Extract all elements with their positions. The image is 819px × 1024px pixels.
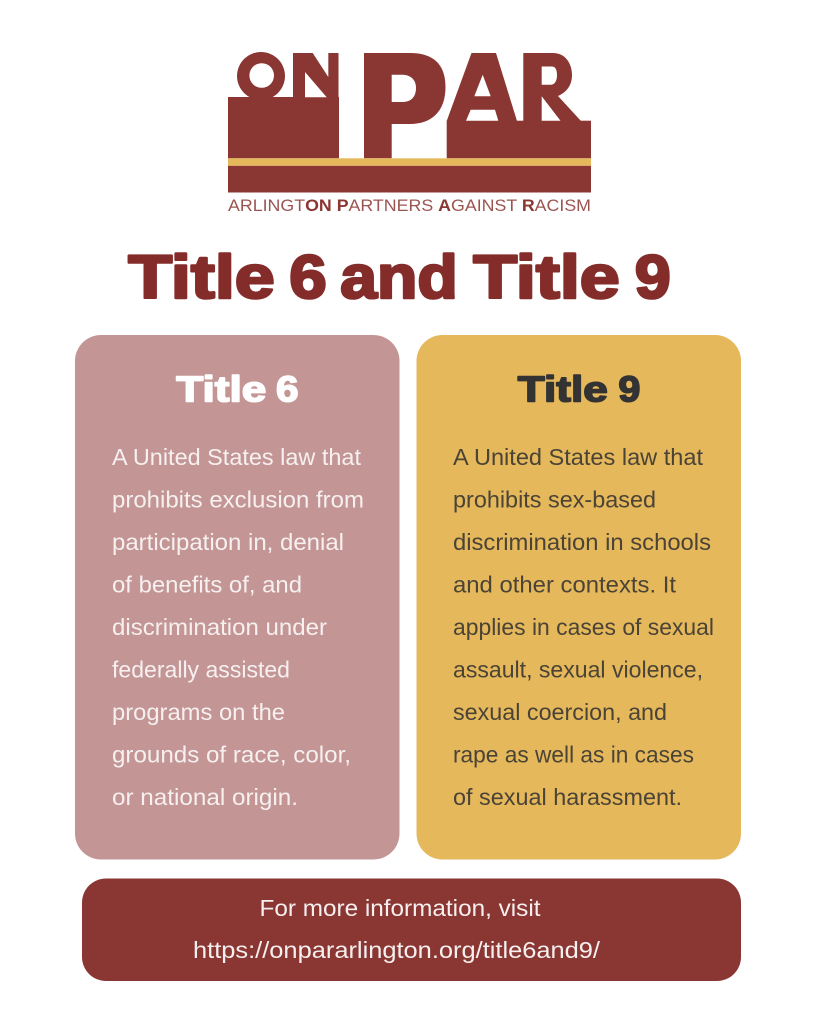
body text: Title 6 definition: of benefits of, and [112, 572, 302, 598]
main title: Title [128, 243, 275, 311]
footer text: https://onpararlington.org/title6and9/ [193, 937, 601, 963]
heading: Title 6: 6 [276, 368, 298, 410]
panel: Title 9 [416, 335, 741, 860]
logo mark: letter counters [249, 53, 560, 121]
body text: Title 6 definition: grounds of race, color, [112, 742, 351, 768]
body text: Title 6 definition: prohibits exclusion from [112, 486, 364, 512]
footer text: For more information, visit [260, 895, 541, 921]
body text: Title 9 definition: assault, sexual violence, [453, 656, 703, 682]
body text: Title 6 definition: discrimination under [112, 614, 327, 640]
body text: Title 6 definition: or national origin. [112, 784, 298, 810]
heading: Title 9: Title [518, 368, 608, 410]
main title: Title [473, 243, 620, 311]
main title [128, 243, 671, 311]
body text: Title 6 definition: programs on the [112, 699, 285, 725]
body text: Title 9 definition: applies in cases of sexual [453, 614, 714, 640]
body text: Title 9 definition: of sexual harassment. [453, 784, 682, 810]
body text: Title 9 definition: prohibits sex-based [453, 486, 656, 512]
logo gold bar [228, 158, 591, 166]
body text: Title 9 definition [453, 444, 714, 810]
heading: Title 6: Title [176, 368, 266, 410]
main title: 6 [289, 243, 327, 311]
footer text [193, 895, 601, 963]
body text: Title 9 definition: and other contexts. It [453, 572, 677, 598]
body text: Title 9 definition: sexual coercion, and [453, 699, 667, 725]
logo: On Par [228, 52, 591, 215]
body text: Title 9 definition: discrimination in schools [453, 529, 711, 555]
body text: Title 6 definition [112, 444, 364, 810]
heading: Title 9: 9 [618, 368, 640, 410]
body text: Title 9 definition: rape as well as in cases [453, 742, 694, 768]
logo tagline: ARLINGTON PARTNERS AGAINST RACISM [228, 196, 591, 215]
body text: Title 6 definition: federally assisted [112, 656, 290, 682]
panel background: Title 6 [75, 335, 400, 860]
panel: more information footer [82, 878, 741, 981]
heading: Title 9 [518, 368, 640, 410]
logo mark: block letters [228, 52, 591, 192]
body text: Title 9 definition: A United States law that [453, 444, 704, 470]
main title: 9 [635, 243, 671, 311]
panel: Title 6 [75, 335, 400, 860]
panel background: Title 9 [416, 335, 741, 860]
main title: and [340, 243, 458, 311]
heading: Title 6 [176, 368, 298, 410]
body text: Title 6 definition: participation in, denial [112, 529, 344, 555]
footer background [82, 878, 741, 981]
body text: Title 6 definition: A United States law that [112, 444, 362, 470]
